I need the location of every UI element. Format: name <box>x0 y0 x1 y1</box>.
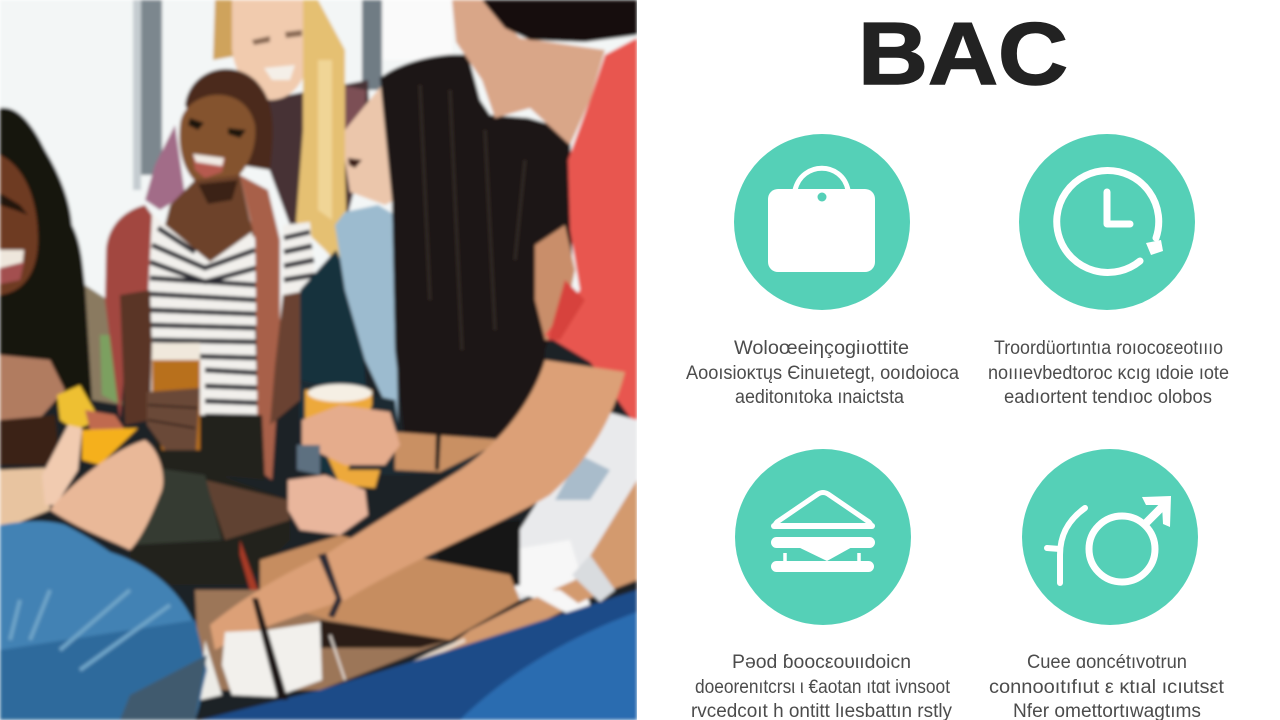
text block: bottom right <box>989 652 1225 720</box>
text block: top right <box>988 338 1229 408</box>
dark pants and legs <box>130 465 520 590</box>
text block: bottom right: connooıtıfıut ε κtıal ıcıutsεt <box>989 677 1225 698</box>
white sneaker <box>200 553 342 700</box>
title: BAC <box>858 4 1068 103</box>
text block: top left: Aooısiοκτųs Єinuıetegt, ooıdoioca <box>686 363 959 384</box>
woman with striped shirt <box>105 69 316 480</box>
text block: bottom right: Cuee ɑoncétıvotrun <box>1027 652 1187 673</box>
text block: top left: aeditonıtoka ınaictsta <box>735 387 904 408</box>
text block: top right: eadıortent tendıoc olobos <box>1004 387 1212 408</box>
blue jeans left <box>0 521 207 720</box>
floor <box>195 590 450 690</box>
woman with long black hair <box>300 54 575 490</box>
thigh <box>260 535 520 640</box>
text block: bottom left <box>691 652 952 720</box>
icon: clock in teal circle <box>1019 134 1195 310</box>
text block: bottom left: Pəod ɓoocεoυιıdoicn <box>732 652 911 673</box>
bright jeans right <box>200 590 637 720</box>
hand holding foamy beer cup <box>288 384 400 535</box>
icon: sandwich in teal circle <box>735 449 911 625</box>
woman with curly hair <box>0 108 122 405</box>
text block: top left <box>686 338 959 408</box>
white shorts <box>510 400 637 612</box>
text block: top right: Troordüortıntıa roıocoεeotıııo <box>994 338 1223 359</box>
hand holding amber beer glass <box>147 343 200 450</box>
text block: top left: Woloœeiηçogiıottite <box>734 338 909 359</box>
woman with blonde hair <box>213 0 370 275</box>
icon: bag in teal circle <box>734 134 910 310</box>
icon: male symbol in teal circle <box>1022 449 1198 625</box>
lower arm and bracelet <box>410 480 637 665</box>
photo panel: friends sharing drinks <box>0 0 637 720</box>
text block: bottom left: doeorenıtcrsι ι €aotan ıtɑt ivnsoot <box>695 677 951 698</box>
woman in red top <box>452 0 637 427</box>
window background <box>0 0 637 330</box>
left hands with yellow cups <box>0 355 163 550</box>
forearm of woman in red <box>210 360 625 650</box>
text block: top right: noıııevbedtoroc κcıg ιdoie ıote <box>988 363 1229 384</box>
